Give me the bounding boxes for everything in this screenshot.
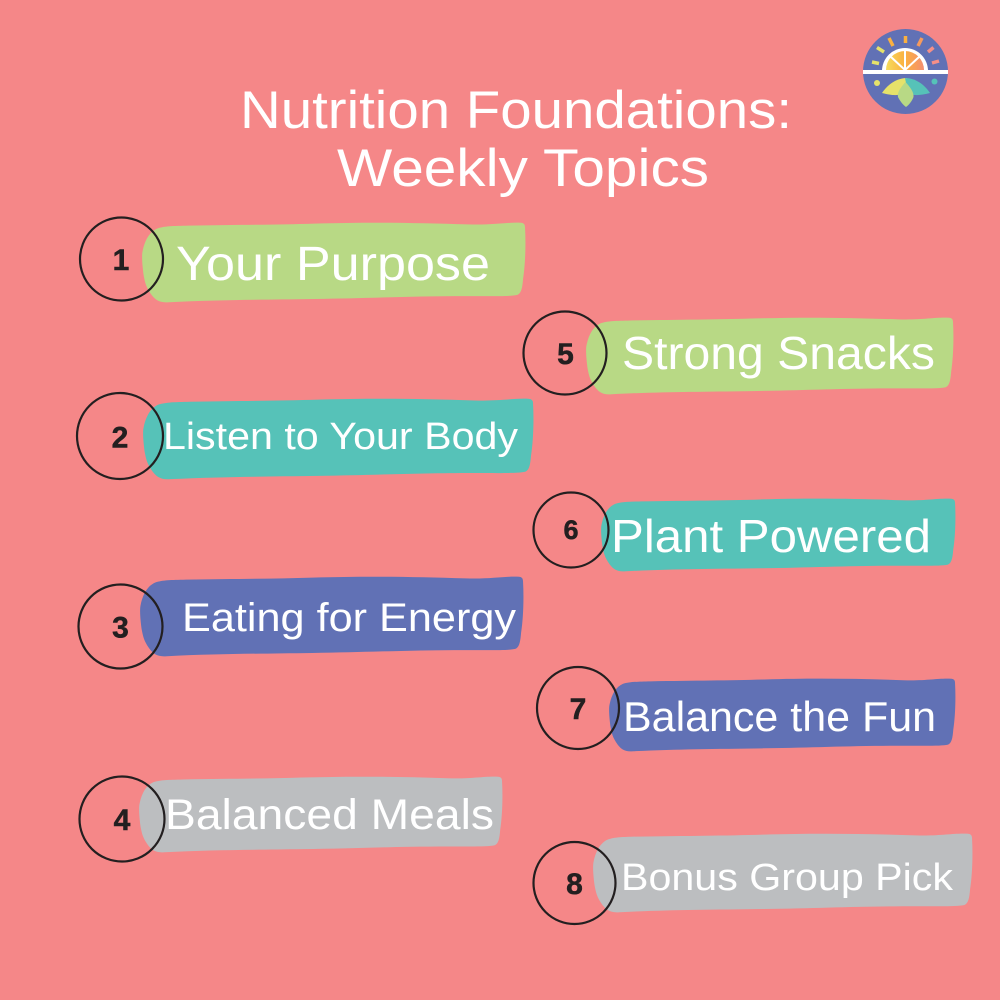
title: Nutrition Foundations: xyxy=(240,81,792,140)
topic 8: Bonus Group Pick xyxy=(534,834,972,924)
topic 6: Plant Powered: 6 xyxy=(563,515,579,545)
topic 6: Plant Powered xyxy=(534,492,955,571)
topic 5: Strong Snacks: Strong Snacks xyxy=(622,327,935,379)
topic 2: Listen to Your Body: 2 xyxy=(112,422,128,454)
topic 6: Plant Powered: Plant Powered xyxy=(611,510,931,562)
topic 4: Balanced Meals: Balanced Meals xyxy=(165,791,494,839)
topic 4: Balanced Meals xyxy=(80,776,502,862)
topic 5: Strong Snacks xyxy=(524,312,953,394)
topic 5: Strong Snacks: 5 xyxy=(557,338,574,371)
topic 3: Eating for Energy xyxy=(78,577,523,668)
title xyxy=(240,81,792,198)
logo: citrus and leaves badge xyxy=(863,29,948,114)
topic 7: Balance the Fun: 7 xyxy=(570,693,586,726)
topic 1: Your Purpose: 1 xyxy=(113,244,129,277)
topic 3: Eating for Energy: 3 xyxy=(112,612,129,644)
topic 8: Bonus Group Pick: 8 xyxy=(566,868,583,901)
topic 2: Listen to Your Body: Listen to Your Body xyxy=(163,416,518,458)
topic 2: Listen to Your Body xyxy=(77,393,533,479)
topic 4: Balanced Meals: 4 xyxy=(114,804,131,837)
title: Weekly Topics xyxy=(337,139,709,198)
topic 1: Your Purpose xyxy=(80,218,525,302)
topic 8: Bonus Group Pick: Bonus Group Pick xyxy=(621,857,954,899)
topic 7: Balance the Fun xyxy=(537,667,955,751)
topic 7: Balance the Fun: Balance the Fun xyxy=(623,693,936,740)
topic 3: Eating for Energy: Eating for Energy xyxy=(182,596,516,640)
topic 1: Your Purpose: Your Purpose xyxy=(176,238,490,291)
